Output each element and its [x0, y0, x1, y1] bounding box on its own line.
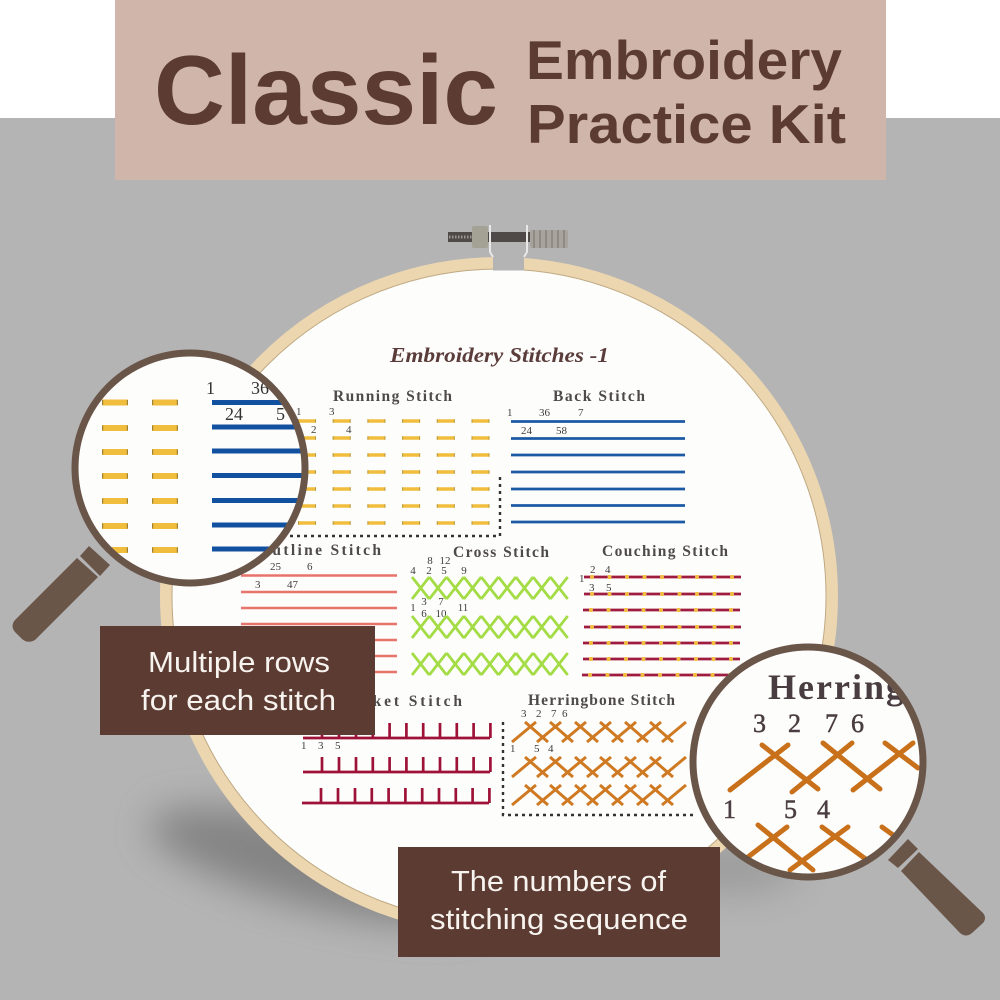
hoop screw: [448, 225, 568, 257]
numbers: cross: 1: [410, 602, 416, 614]
handle neck: [888, 839, 918, 868]
magnifier: left, running and back stitches: [12, 353, 305, 642]
label: Back Stitch: Back Stitch: [553, 388, 645, 405]
panel: herringbone stitch: [510, 692, 686, 805]
magnifier: right, herringbone numbers: [693, 647, 985, 936]
lens fill: [75, 353, 305, 583]
numbers: cross: 11: [458, 602, 468, 614]
label: Cross Stitch: Cross Stitch: [453, 544, 549, 561]
numbers: back: 58: [556, 425, 568, 437]
callout: stitching sequence: [398, 847, 720, 957]
numbers: blanket: 3: [318, 740, 324, 752]
magnified stitches: 1: [206, 378, 215, 398]
magnified stitches: Herring: [768, 667, 906, 707]
numbers: couching: 4: [605, 564, 611, 576]
handle neck: [80, 546, 110, 576]
callout text line 2: for each stitch: [141, 685, 336, 717]
hoop shadow: lower right: [660, 842, 800, 894]
label: Running Stitch: Running Stitch: [333, 388, 452, 405]
numbers: herringbone: 1: [510, 743, 516, 755]
stitches: couching: [582, 575, 741, 677]
numbers: outline: 47: [287, 579, 298, 591]
label: Blanket Stitch: Blanket Stitch: [330, 693, 462, 710]
label: Outline Stitch: Outline Stitch: [258, 542, 381, 559]
numbers: couching: 1: [579, 573, 584, 585]
magnified stitches: 3: [753, 709, 766, 738]
magnified stitches: 4: [817, 795, 830, 824]
label: Herringbone Stitch: Herringbone Stitch: [528, 692, 675, 709]
numbers: herringbone: 3: [521, 708, 527, 720]
numbers: herringbone: 2: [536, 708, 542, 720]
numbers: cross: 8: [427, 555, 433, 567]
numbers: back: 7: [578, 407, 584, 419]
numbers: herringbone: 5: [534, 743, 540, 755]
handle: [12, 558, 98, 642]
numbers: cross: 7: [438, 596, 444, 608]
numbers: herringbone: 4: [548, 743, 554, 755]
numbers: outline: 25: [270, 561, 282, 573]
numbers: cross: 5: [441, 565, 447, 577]
numbers: couching: 2: [590, 564, 596, 576]
panel: outline stitch: [241, 542, 397, 672]
magnified stitches: 5: [276, 404, 285, 424]
magnified stitches: 7: [825, 709, 838, 738]
magnified stitches: 5: [784, 795, 797, 824]
lens fill: [693, 647, 923, 877]
title banner: [115, 0, 886, 180]
hoop shadow: lower left: [140, 783, 500, 949]
numbers: outline: 3: [255, 579, 261, 591]
magnified stitches: 6: [851, 709, 864, 738]
panel: back stitch: [507, 388, 685, 522]
numbers: cross: 9: [461, 565, 467, 577]
numbers: cross: 3: [421, 596, 427, 608]
lens ring: [693, 647, 923, 877]
stitches: outline: [241, 576, 397, 672]
panel: running stitch: [296, 388, 490, 523]
numbers: herringbone: 6: [562, 708, 568, 720]
label: Couching Stitch: Couching Stitch: [602, 543, 728, 560]
stitches: herringbone: [512, 722, 686, 805]
handle: [901, 852, 985, 936]
numbers: cross: 4: [410, 565, 416, 577]
panel: blanket stitch: [301, 693, 490, 803]
panel: couching stitch: [579, 543, 741, 677]
numbers: blanket: 5: [335, 740, 341, 752]
embroidery hoop: [166, 225, 832, 929]
heading: Embroidery Stitches -1: Embroidery Stitches -1: [389, 343, 609, 367]
lens ring: [75, 353, 305, 583]
numbers: running: 4: [346, 424, 352, 436]
numbers: back: 24: [521, 425, 532, 437]
magnified stitches: 24: [225, 404, 243, 424]
callout text line 1: The numbers of: [451, 866, 667, 898]
stitches: blanket: [302, 723, 490, 803]
stitches: cross: [412, 577, 568, 675]
numbers: herringbone: 7: [551, 708, 557, 720]
callout text line 2: stitching sequence: [430, 904, 688, 936]
title: Classic: Classic: [154, 35, 498, 145]
title: Embroidery: Embroidery: [526, 29, 842, 91]
numbers: cross: 12: [440, 555, 450, 567]
stitches: running: [298, 421, 490, 523]
numbers: running: 3: [329, 406, 335, 418]
numbers: running: 2: [311, 424, 316, 436]
hoop gap: [493, 250, 524, 270]
numbers: cross: 10: [436, 608, 447, 620]
magnified stitches: [102, 378, 302, 550]
magnified stitches: 2: [788, 709, 801, 738]
numbers: outline: 6: [307, 561, 313, 573]
panel: cross stitch: [410, 544, 568, 675]
numbers: running: 1: [296, 406, 302, 418]
title: Practice Kit: Practice Kit: [527, 93, 846, 155]
numbers: back: 1: [507, 407, 512, 419]
magnified stitches: [723, 667, 918, 870]
numbers: back: 36: [539, 407, 550, 419]
callout: multiple rows: [100, 626, 375, 735]
numbers: couching: 5: [606, 582, 612, 594]
magnified stitches: 36: [251, 378, 269, 398]
callout text line 1: Multiple rows: [148, 647, 330, 679]
background: white top strip: [0, 0, 1000, 118]
numbers: blanket: 1: [301, 740, 306, 752]
magnified stitches: 1: [723, 795, 736, 824]
stitches: back: [511, 422, 685, 522]
numbers: couching: 3: [589, 582, 595, 594]
numbers: cross: 2: [426, 565, 432, 577]
numbers: cross: 6: [421, 608, 427, 620]
